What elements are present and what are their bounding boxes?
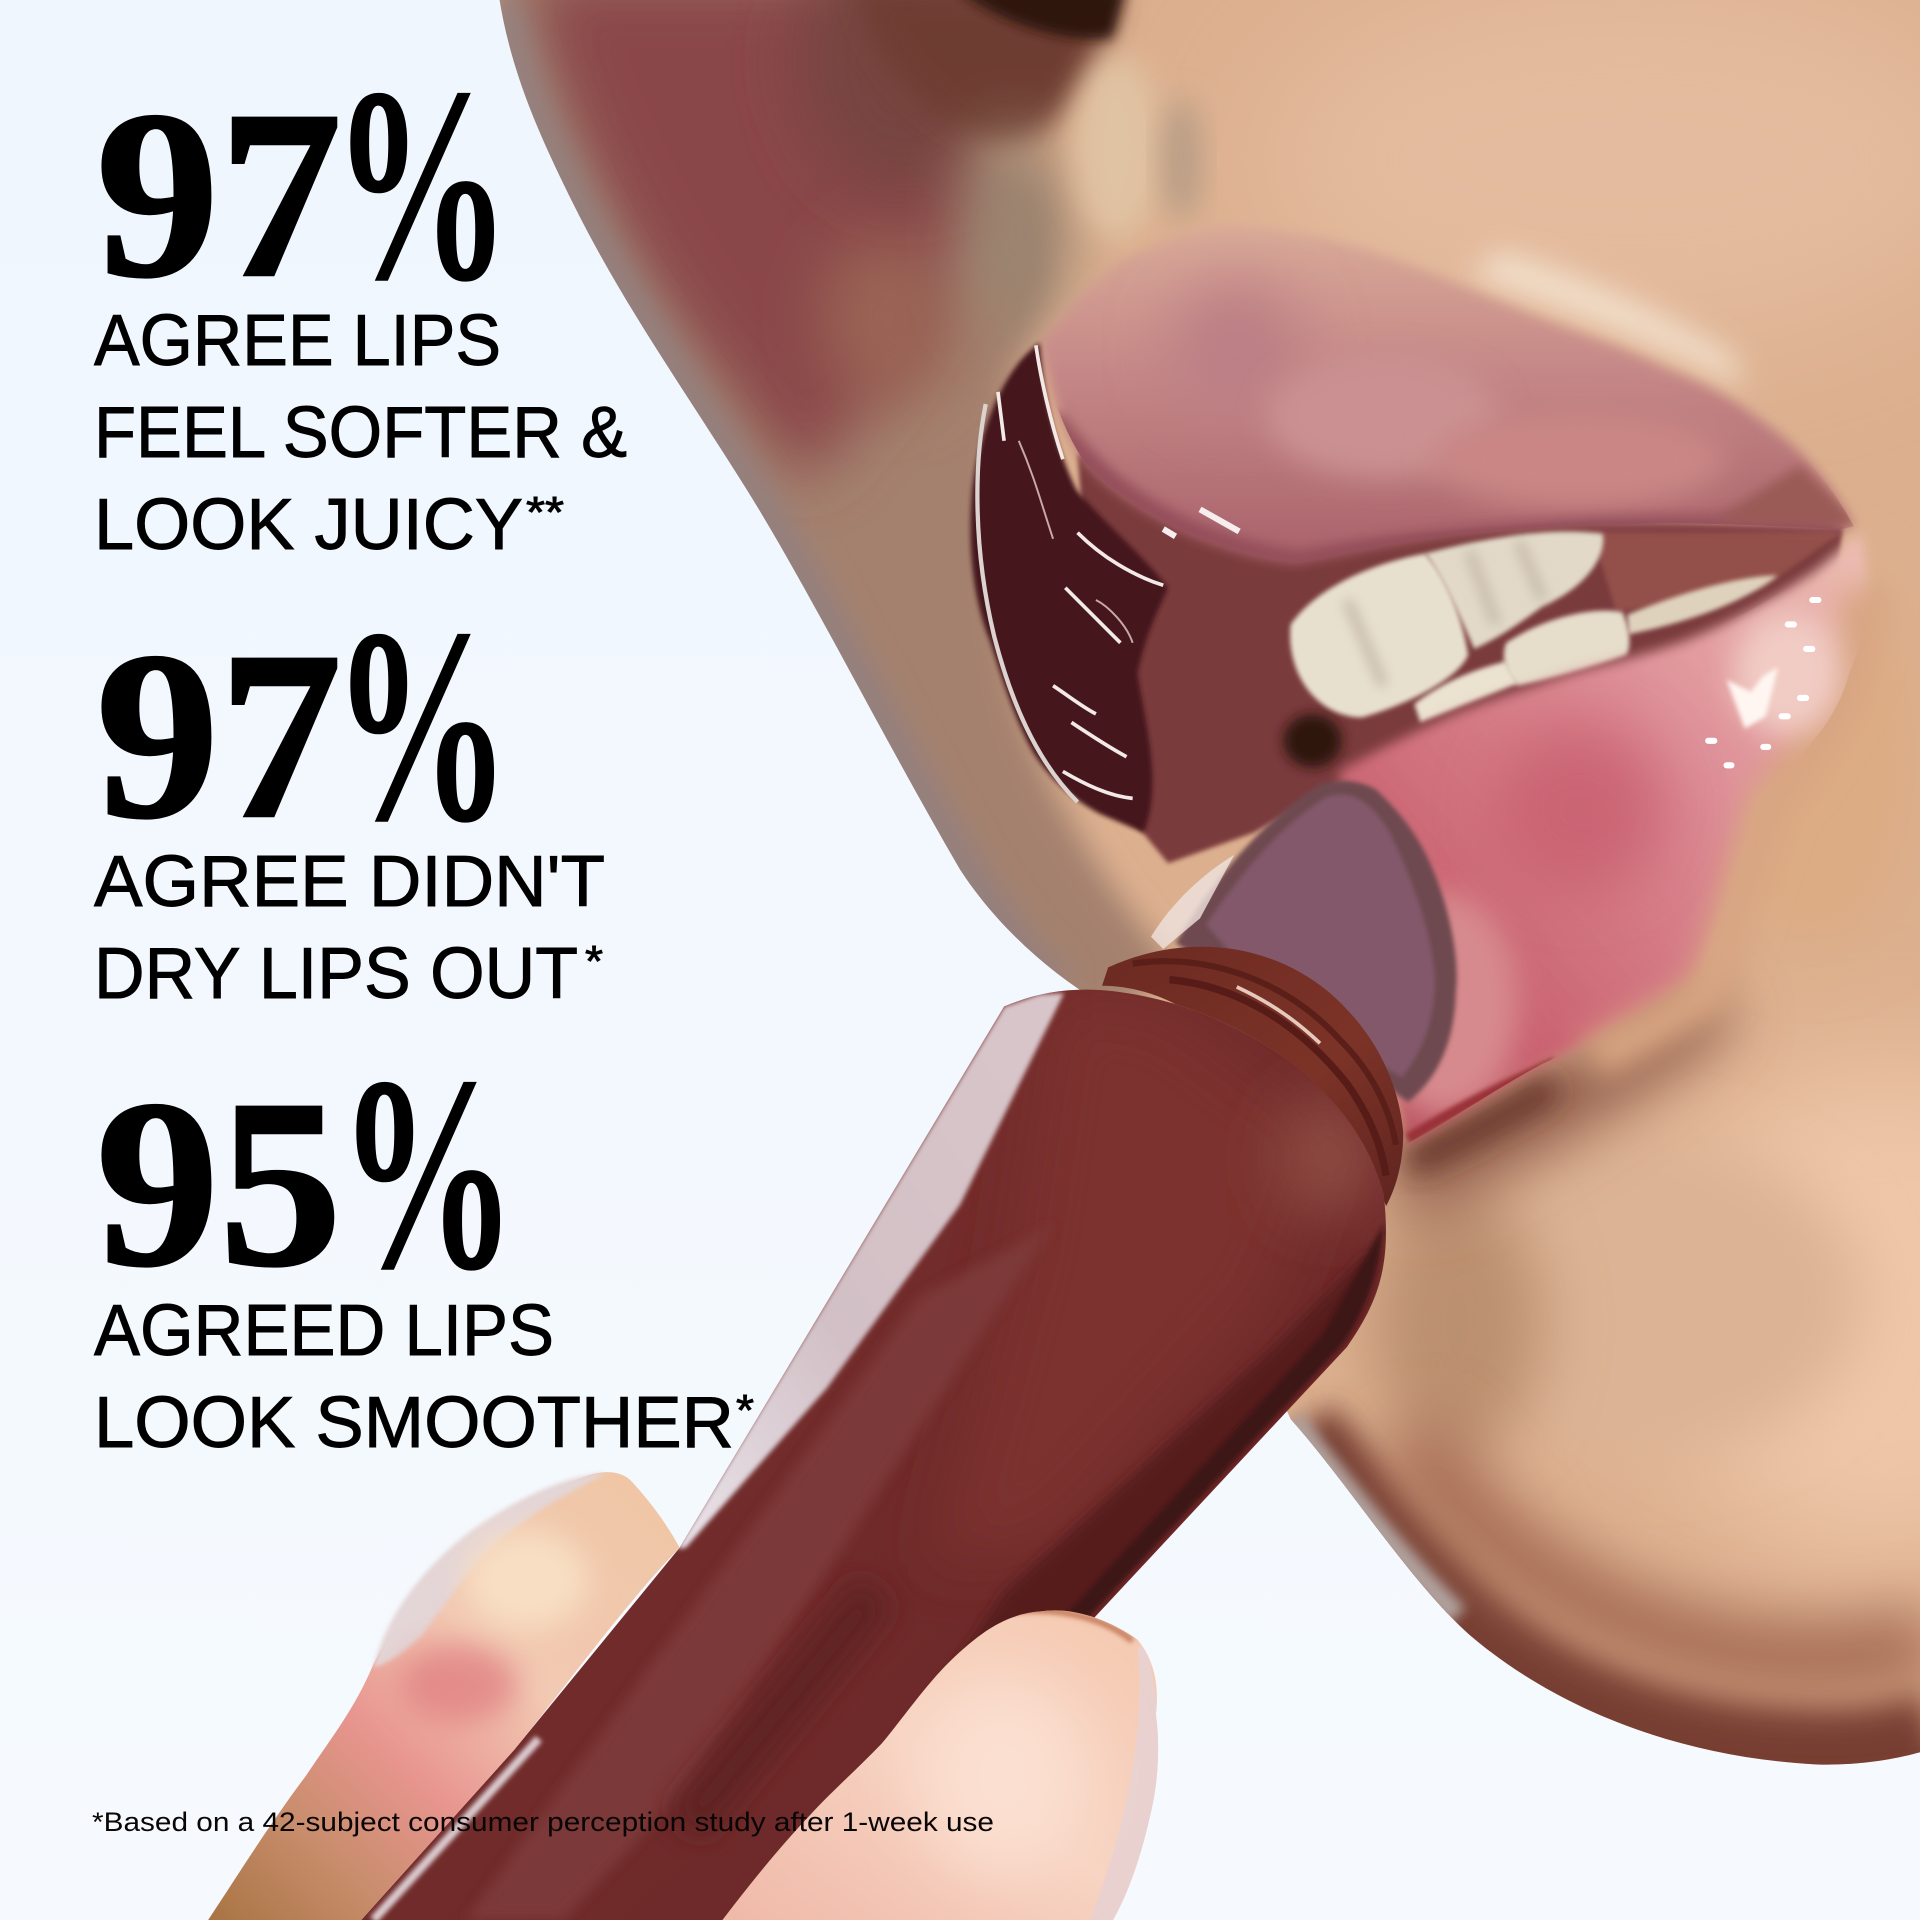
- stat 2 description: [94, 842, 605, 1014]
- stat 1 description: [94, 301, 627, 565]
- stat 3 number: [96, 1019, 517, 1328]
- stat 1 description: AGREE LIPS: [94, 301, 501, 381]
- stat 1: [94, 30, 627, 565]
- stat 1 description: LOOK JUICY: [94, 485, 523, 565]
- face skin: [500, 0, 1920, 1765]
- stat 3: [94, 1019, 754, 1463]
- stat 3 number: %: [338, 1019, 517, 1328]
- skin sheen above lip: [1469, 251, 1745, 389]
- stat 2 description: DRY LIPS OUT: [94, 934, 578, 1014]
- stat 3 description: LOOK SMOOTHER: [94, 1383, 734, 1463]
- stat 1 number: %: [332, 30, 511, 339]
- mouth interior: [1078, 453, 1843, 863]
- stat 2 description: AGREE DIDN'T: [94, 842, 605, 922]
- stat 3 number: 95: [96, 1050, 342, 1316]
- lipstick bullet: [1151, 781, 1457, 1102]
- stat 2 number: %: [332, 571, 511, 880]
- stat 2 number: [96, 571, 511, 880]
- applicator tube: [361, 947, 1403, 1920]
- upper lip: [1040, 227, 1861, 563]
- stat 1 number: [96, 30, 511, 339]
- footnote: *Based on a 42-subject consumer perception study after 1-week use: [92, 1807, 994, 1837]
- stat 1 number: 97: [96, 61, 342, 327]
- stat 3 description: [94, 1291, 754, 1463]
- teeth: [1290, 532, 1778, 722]
- stat 3 description: *: [736, 1386, 754, 1435]
- stat 1 description: FEEL SOFTER &: [94, 393, 627, 473]
- stat 2 description: *: [585, 937, 603, 986]
- stat 2: [94, 571, 605, 1014]
- stat 1 description: **: [526, 488, 564, 537]
- thumb holding tube: [208, 1472, 680, 1920]
- chin shadow band: [1298, 1433, 1920, 1749]
- lower lip: [1340, 533, 1867, 1144]
- glossy dark lip corner: [971, 343, 1239, 833]
- lower finger: [722, 1610, 1158, 1920]
- cheek shadow and rim: [490, 0, 1176, 1029]
- nostril and nose shadow: [857, 0, 1120, 147]
- shadow under lower lip: [1396, 998, 1714, 1188]
- stat 3 description: AGREED LIPS: [94, 1291, 554, 1371]
- stat 2 number: 97: [96, 602, 342, 868]
